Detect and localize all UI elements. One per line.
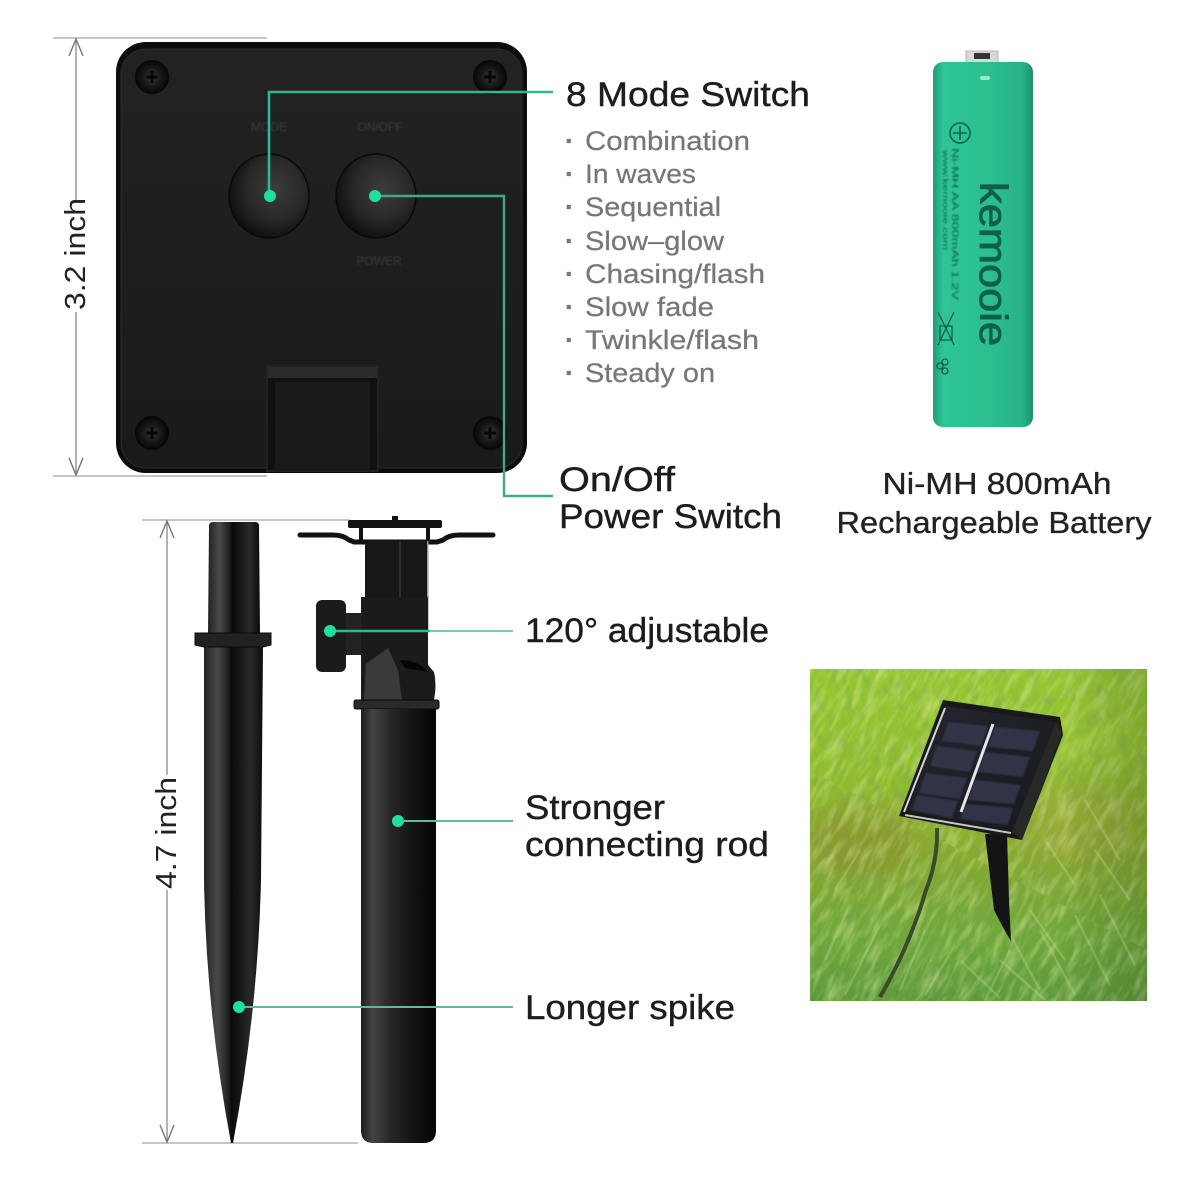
mode list: · [565,192,574,222]
dimension: 4.7 inch height [142,520,358,1143]
mode list [565,126,765,388]
adjustment knob [345,613,361,655]
battery caption: Rechargeable Battery [836,505,1152,540]
brand name: kemooie [971,182,1014,346]
label: Stronger connecting rod: connecting rod [525,826,769,864]
grass blades [825,800,1135,1000]
mode button [229,154,309,238]
dimension: 3.2 inch height [53,38,267,476]
label: On/Off Power Switch: Power Switch [559,498,782,536]
callout line: spike [233,1001,513,1013]
spike collar [195,633,271,647]
mode list: Steady on [585,358,715,388]
mode list: · [565,292,574,322]
callout line: adjustable [324,625,513,637]
mode list: Chasing/flash [585,259,765,289]
screw top right [473,60,507,94]
panel cells [912,722,1040,825]
battery caption [836,466,1152,540]
panel highlights [904,708,945,812]
ground spike [195,522,271,1143]
cable notch [267,366,378,471]
top bracket [300,516,493,542]
panel stake [985,834,1011,941]
battery caption: Ni-MH 800mAh [882,466,1112,501]
solar box back panel [116,42,527,473]
mode list: · [565,226,574,256]
battery [933,51,1033,427]
mode list: Slow–glow [585,226,725,256]
battery small print: Ni-MH AA 800mAh 1.2V [949,148,960,301]
callout line: connecting rod [392,815,513,827]
solar panel [899,700,1063,840]
grass background [805,669,1147,1001]
mode list: Combination [585,126,750,156]
battery polarity mark [950,123,970,143]
mode list: · [565,159,574,189]
mode list: · [565,259,574,289]
battery small print [941,148,960,301]
mode list: · [565,325,574,355]
label: Stronger connecting rod [525,789,769,864]
heading: 8 Mode Switch: 8 Mode Switch [566,76,810,114]
wire [880,828,937,997]
mode list: · [565,358,574,388]
label: Stronger connecting rod: Stronger [525,789,665,827]
dimension: 4.7 inch height: 4.7 inch [151,777,183,889]
rod body [361,709,436,1143]
screw bottom right [473,416,507,450]
label: On/Off Power Switch: On/Off [559,461,676,499]
mode list: Twinkle/flash [585,325,759,355]
rod collar [354,700,439,709]
label: Longer spike: Longer spike [525,989,735,1027]
mode list: Sequential [585,192,721,222]
callout line: mode switch [264,92,553,202]
mode list: · [565,126,574,156]
power button [336,154,416,238]
upper arm [365,541,428,631]
dimension: 3.2 inch height: 3.2 inch [60,198,92,310]
adjustable connecting rod [300,516,493,1143]
embossed label: power: POWER [356,254,402,268]
screw bottom left [135,416,169,450]
label: On/Off Power Switch [559,461,782,536]
mode list: Slow fade [585,292,714,322]
joint [361,597,436,700]
callout line: power switch [369,190,553,496]
mode list: In waves [585,159,696,189]
battery small print: www.kemooie.com [941,148,948,250]
embossed label: on/off: ON/OFF [357,120,403,134]
battery recycle marks [937,312,954,374]
screw top left [135,60,169,94]
label: 120 adjustable: 120° adjustable [525,612,769,650]
embossed label: mode: MODE [251,120,287,134]
photo: solar panel on grass [805,669,1147,1001]
